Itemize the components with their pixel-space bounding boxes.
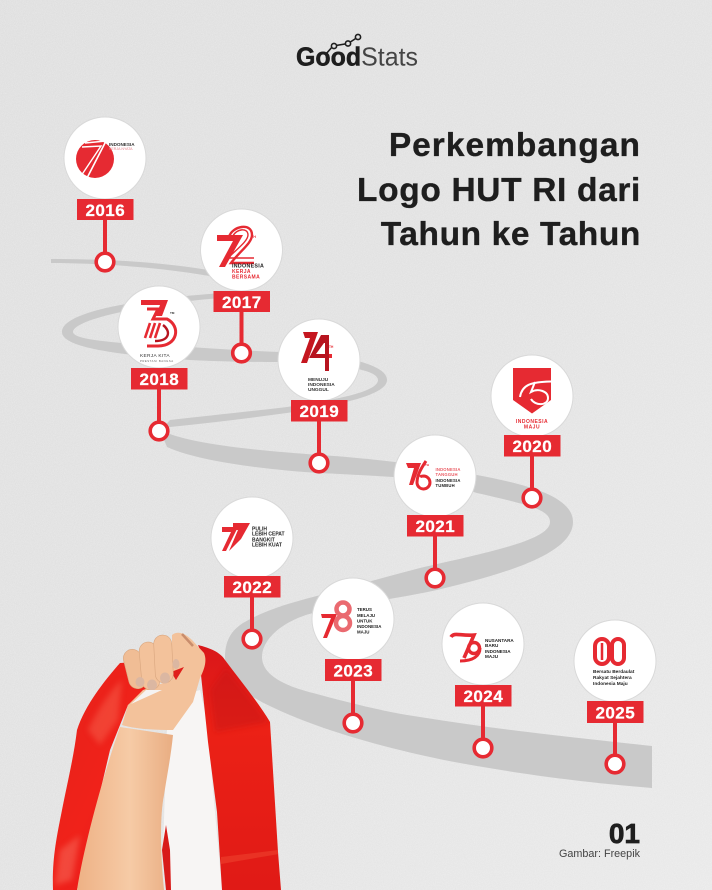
logo badge 2022: PULIH (252, 526, 267, 532)
logo wordmark: GoodStats (296, 42, 418, 72)
logo badge 2017: BERSAMA (232, 274, 260, 280)
arm (77, 727, 173, 890)
year label 2021: 2021 (415, 517, 455, 536)
logo badge 2024: INDONESIA (485, 649, 511, 654)
year label 2023 (325, 659, 382, 681)
stem and marker 2021 (426, 535, 444, 587)
logo badge 2018: TM (170, 311, 175, 315)
year label 2019: 2019 (299, 402, 339, 421)
year label 2022 (224, 576, 280, 598)
milestone 2016 (64, 117, 146, 271)
winding road (51, 259, 652, 788)
logo badge 2016: TH (106, 152, 110, 156)
logo badge 2021: INDONESIA (436, 467, 461, 472)
stem and marker 2023 (344, 680, 362, 732)
stem and marker 2020 (523, 455, 541, 507)
milestone 2020 (491, 355, 573, 507)
milestone 2023 (312, 578, 394, 732)
page number: 01 (609, 818, 640, 849)
logo badge 2016: KERJA NYATA (109, 147, 133, 151)
milestone 2024 (442, 603, 524, 757)
stem and marker 2017 (233, 311, 250, 362)
logo badge 2020 (491, 355, 573, 437)
logo badge 2021: TANGGUH (436, 472, 458, 477)
logo badge 2016: INDONESIA (109, 142, 135, 147)
logo badge 2025: Indonesia Maju (593, 681, 628, 687)
year label 2018 (131, 368, 188, 390)
logo badge 2023: UNTUK (357, 618, 373, 624)
logo badge 2019: TH (329, 345, 334, 349)
year label 2025 (587, 701, 644, 723)
logo badge 2021: TUMBUH (436, 483, 455, 488)
logo badge 2017: KERJA (232, 269, 251, 275)
stem and marker 2024 (474, 705, 492, 757)
title: Logo HUT RI dari (357, 172, 641, 209)
year label 2020 (504, 435, 560, 456)
title: Tahun ke Tahun (381, 216, 641, 253)
logo badge 2017 (200, 209, 282, 291)
year label 2025: 2025 (595, 704, 635, 722)
logo badge 2023: TERUS (357, 607, 372, 612)
logo badge 2023: MELAJU (357, 613, 375, 618)
year label 2017: 2017 (222, 293, 262, 312)
logo badge 2025: Rakyat Sejahtera (593, 675, 632, 681)
year label 2024: 2024 (463, 687, 503, 706)
logo badge 2024: BARU (485, 643, 499, 648)
logo badge 2023: MAJU (357, 630, 369, 634)
logo badge 2021: TH (425, 463, 429, 467)
flag left fold (52, 662, 146, 890)
year label 2016: 2016 (85, 201, 125, 220)
logo badge 2020: MAJU (524, 424, 540, 430)
GoodStats logo (296, 34, 418, 72)
logo badge 2019: INDONESIA (308, 382, 335, 388)
flag right fold (195, 640, 285, 890)
logo badge 2024 (442, 603, 524, 685)
year label 2018: 2018 (139, 370, 179, 389)
logo badge 2018: KERJA KITA (140, 353, 170, 359)
stem and marker 2019 (310, 420, 328, 472)
stem and marker 2022 (243, 596, 261, 648)
year label 2016 (77, 199, 134, 220)
year label 2023: 2023 (333, 662, 373, 680)
stem and marker 2018 (150, 388, 168, 440)
milestone 2021 (394, 435, 476, 587)
logo badge 2023 (312, 578, 394, 660)
flag white inner (163, 690, 222, 890)
logo badge 2021 (394, 435, 476, 517)
logo badge 2022: LEBIH CEPAT (252, 532, 285, 538)
logo badge 2022 (211, 497, 293, 579)
logo badge 2021: INDONESIA (436, 478, 461, 483)
milestone 2019 (278, 319, 360, 472)
logo badge 2018 (118, 286, 200, 368)
logo badge 2023: INDONESIA (357, 624, 382, 629)
logo badge 2022: BANGKIT (252, 538, 275, 544)
image credit: Gambar: Freepik (559, 848, 641, 860)
logo badge 2022: LEBIH KUAT (252, 542, 282, 548)
logo badge 2017: INDONESIA (232, 264, 264, 270)
year label 2019 (291, 400, 348, 422)
hand holding flag photo (50, 633, 285, 890)
logo chart line icon (326, 34, 361, 54)
milestone 2018 (118, 286, 200, 440)
year label 2021 (407, 515, 464, 536)
logo badge 2025: Bersatu Berdaulat (593, 669, 635, 675)
year label 2020: 2020 (512, 437, 552, 456)
flag small red fold (162, 825, 171, 890)
logo badge 2020: INDONESIA (516, 419, 548, 425)
logo badge 2017: TH (251, 235, 256, 239)
logo badge 2025 (574, 620, 656, 702)
logo badge 2024: NUSANTARA (485, 638, 514, 643)
milestone 2025 (574, 620, 656, 773)
title (357, 127, 641, 253)
milestone 2022 (211, 497, 293, 648)
logo badge 2018: PRESTASI BANGSA (140, 359, 174, 363)
logo badge 2024: MAJU (485, 654, 499, 659)
title: Perkembangan (389, 127, 641, 164)
stem and marker 2025 (606, 722, 624, 773)
year label 2024 (455, 685, 512, 706)
logo badge 2019: MENUJU (308, 377, 329, 383)
milestone 2017 (200, 209, 282, 362)
year label 2017 (214, 291, 270, 312)
logo badge 2019: UNGGUL (308, 387, 329, 393)
year label 2022: 2022 (232, 578, 272, 597)
logo badge 2016 (64, 117, 146, 199)
fist (121, 633, 205, 730)
logo badge 2019 (278, 319, 360, 401)
stem and marker 2016 (96, 219, 114, 271)
